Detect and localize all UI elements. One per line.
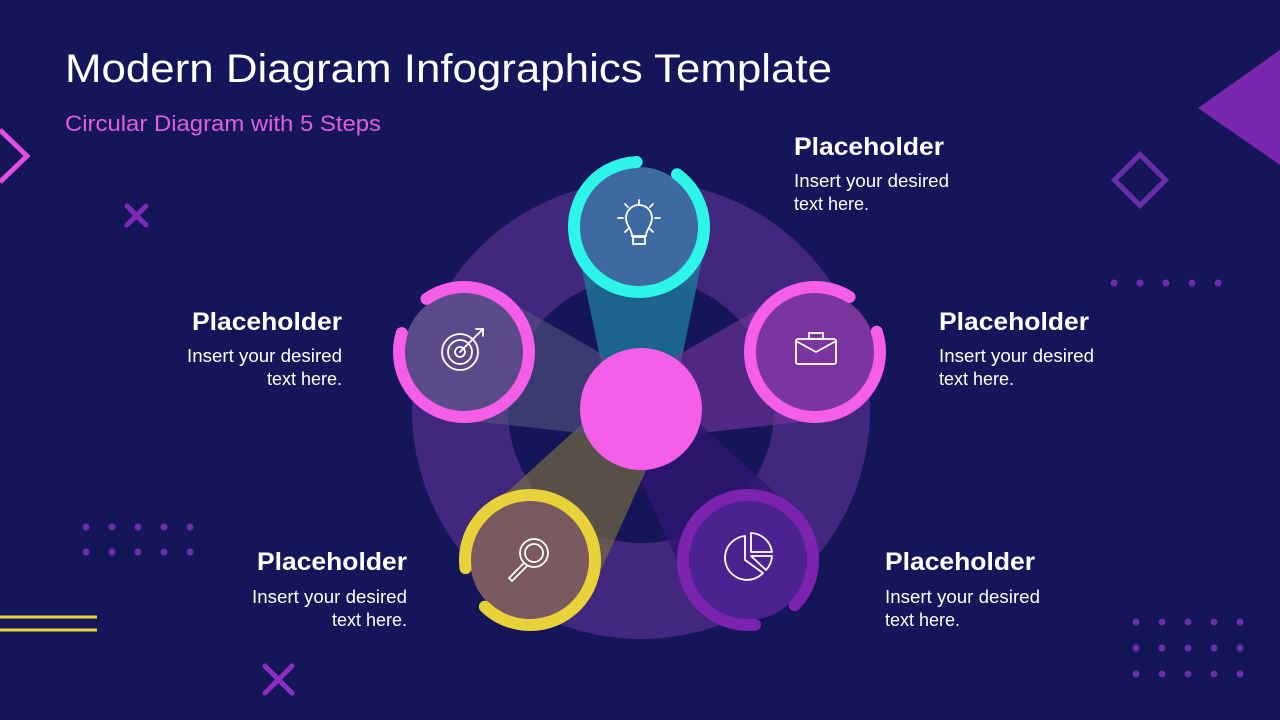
petal: bottom right	[586, 370, 804, 598]
petal: right	[620, 289, 836, 475]
circular diagram	[373, 136, 897, 639]
text block: left: text here.	[267, 369, 342, 389]
text block: bottom right: text here.	[885, 610, 960, 630]
outer ring	[412, 181, 870, 639]
decoration: purple x top-left	[127, 206, 146, 225]
petal: left	[446, 289, 662, 475]
text block: bottom left: text here.	[332, 610, 407, 630]
decoration: dot grid left	[82, 524, 194, 556]
text block: bottom left: Insert your desired	[252, 587, 407, 607]
node: bottom left (search)	[458, 488, 602, 632]
decoration: triangle right	[1198, 50, 1280, 165]
icon: light bulb	[618, 200, 660, 244]
text block: right: Placeholder	[939, 308, 1089, 336]
text block: left: Placeholder	[192, 308, 342, 336]
text block: left	[187, 308, 342, 389]
text block: top: Insert your desired	[794, 171, 949, 191]
decoration: pink chevron left	[0, 130, 27, 182]
text block: top: Placeholder	[794, 133, 944, 161]
subtitle: Circular Diagram with 5 Steps	[65, 111, 381, 136]
text block: bottom right: Placeholder	[885, 548, 1035, 576]
decoration: dot grid bottom right	[1132, 618, 1244, 678]
icon: briefcase	[796, 333, 836, 364]
decoration: yellow lines	[0, 617, 97, 630]
node: right (briefcase)	[733, 270, 897, 434]
decoration: dot row right	[1110, 280, 1222, 286]
petal: bottom left	[478, 370, 696, 598]
node: left (target)	[373, 261, 555, 443]
node: bottom right (pie chart)	[677, 489, 819, 631]
decoration: diamond	[1115, 155, 1165, 205]
text block: top	[794, 133, 949, 214]
text block: bottom left	[252, 548, 407, 630]
text block: left: Insert your desired	[187, 346, 342, 366]
text block: right	[939, 308, 1094, 389]
center circle	[580, 348, 702, 470]
text block: top: text here.	[794, 194, 869, 214]
icon: magnifier	[509, 539, 548, 581]
text block: bottom right	[885, 548, 1040, 630]
decoration: purple x bottom	[265, 666, 292, 693]
petal: top	[573, 227, 709, 410]
text block: right: text here.	[939, 369, 1014, 389]
icon: target	[442, 329, 483, 370]
icon: pie chart	[725, 533, 772, 580]
text block: bottom right: Insert your desired	[885, 587, 1040, 607]
text block: right: Insert your desired	[939, 346, 1094, 366]
title: Modern Diagram Infographics Template	[65, 47, 832, 91]
text block: bottom left: Placeholder	[257, 548, 407, 576]
node: top (idea)	[548, 136, 730, 318]
